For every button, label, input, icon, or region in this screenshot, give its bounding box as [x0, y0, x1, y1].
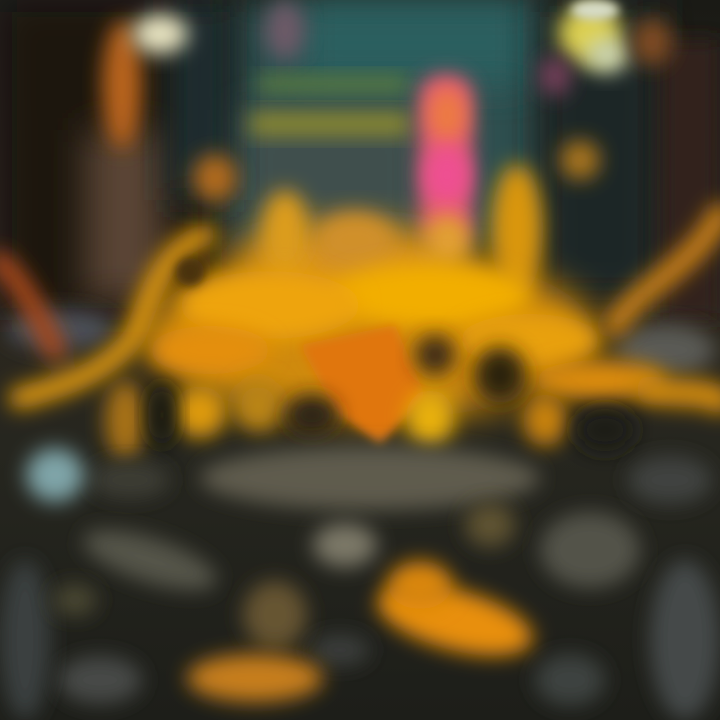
pink and orange column	[420, 75, 472, 245]
splash tendrils	[0, 215, 720, 400]
orange foreground shapes	[187, 561, 540, 702]
lights and upper accents	[102, 0, 672, 202]
central yellow-orange splash	[105, 164, 665, 460]
side highlights behind splash	[5, 310, 715, 376]
foreground: gray rubble	[0, 446, 720, 720]
dark gaps in the splash	[148, 258, 635, 452]
blurred sign on teal backdrop	[250, 75, 410, 136]
pale blue highlight	[26, 448, 84, 502]
background: city wall and teal backdrop	[0, 0, 720, 320]
